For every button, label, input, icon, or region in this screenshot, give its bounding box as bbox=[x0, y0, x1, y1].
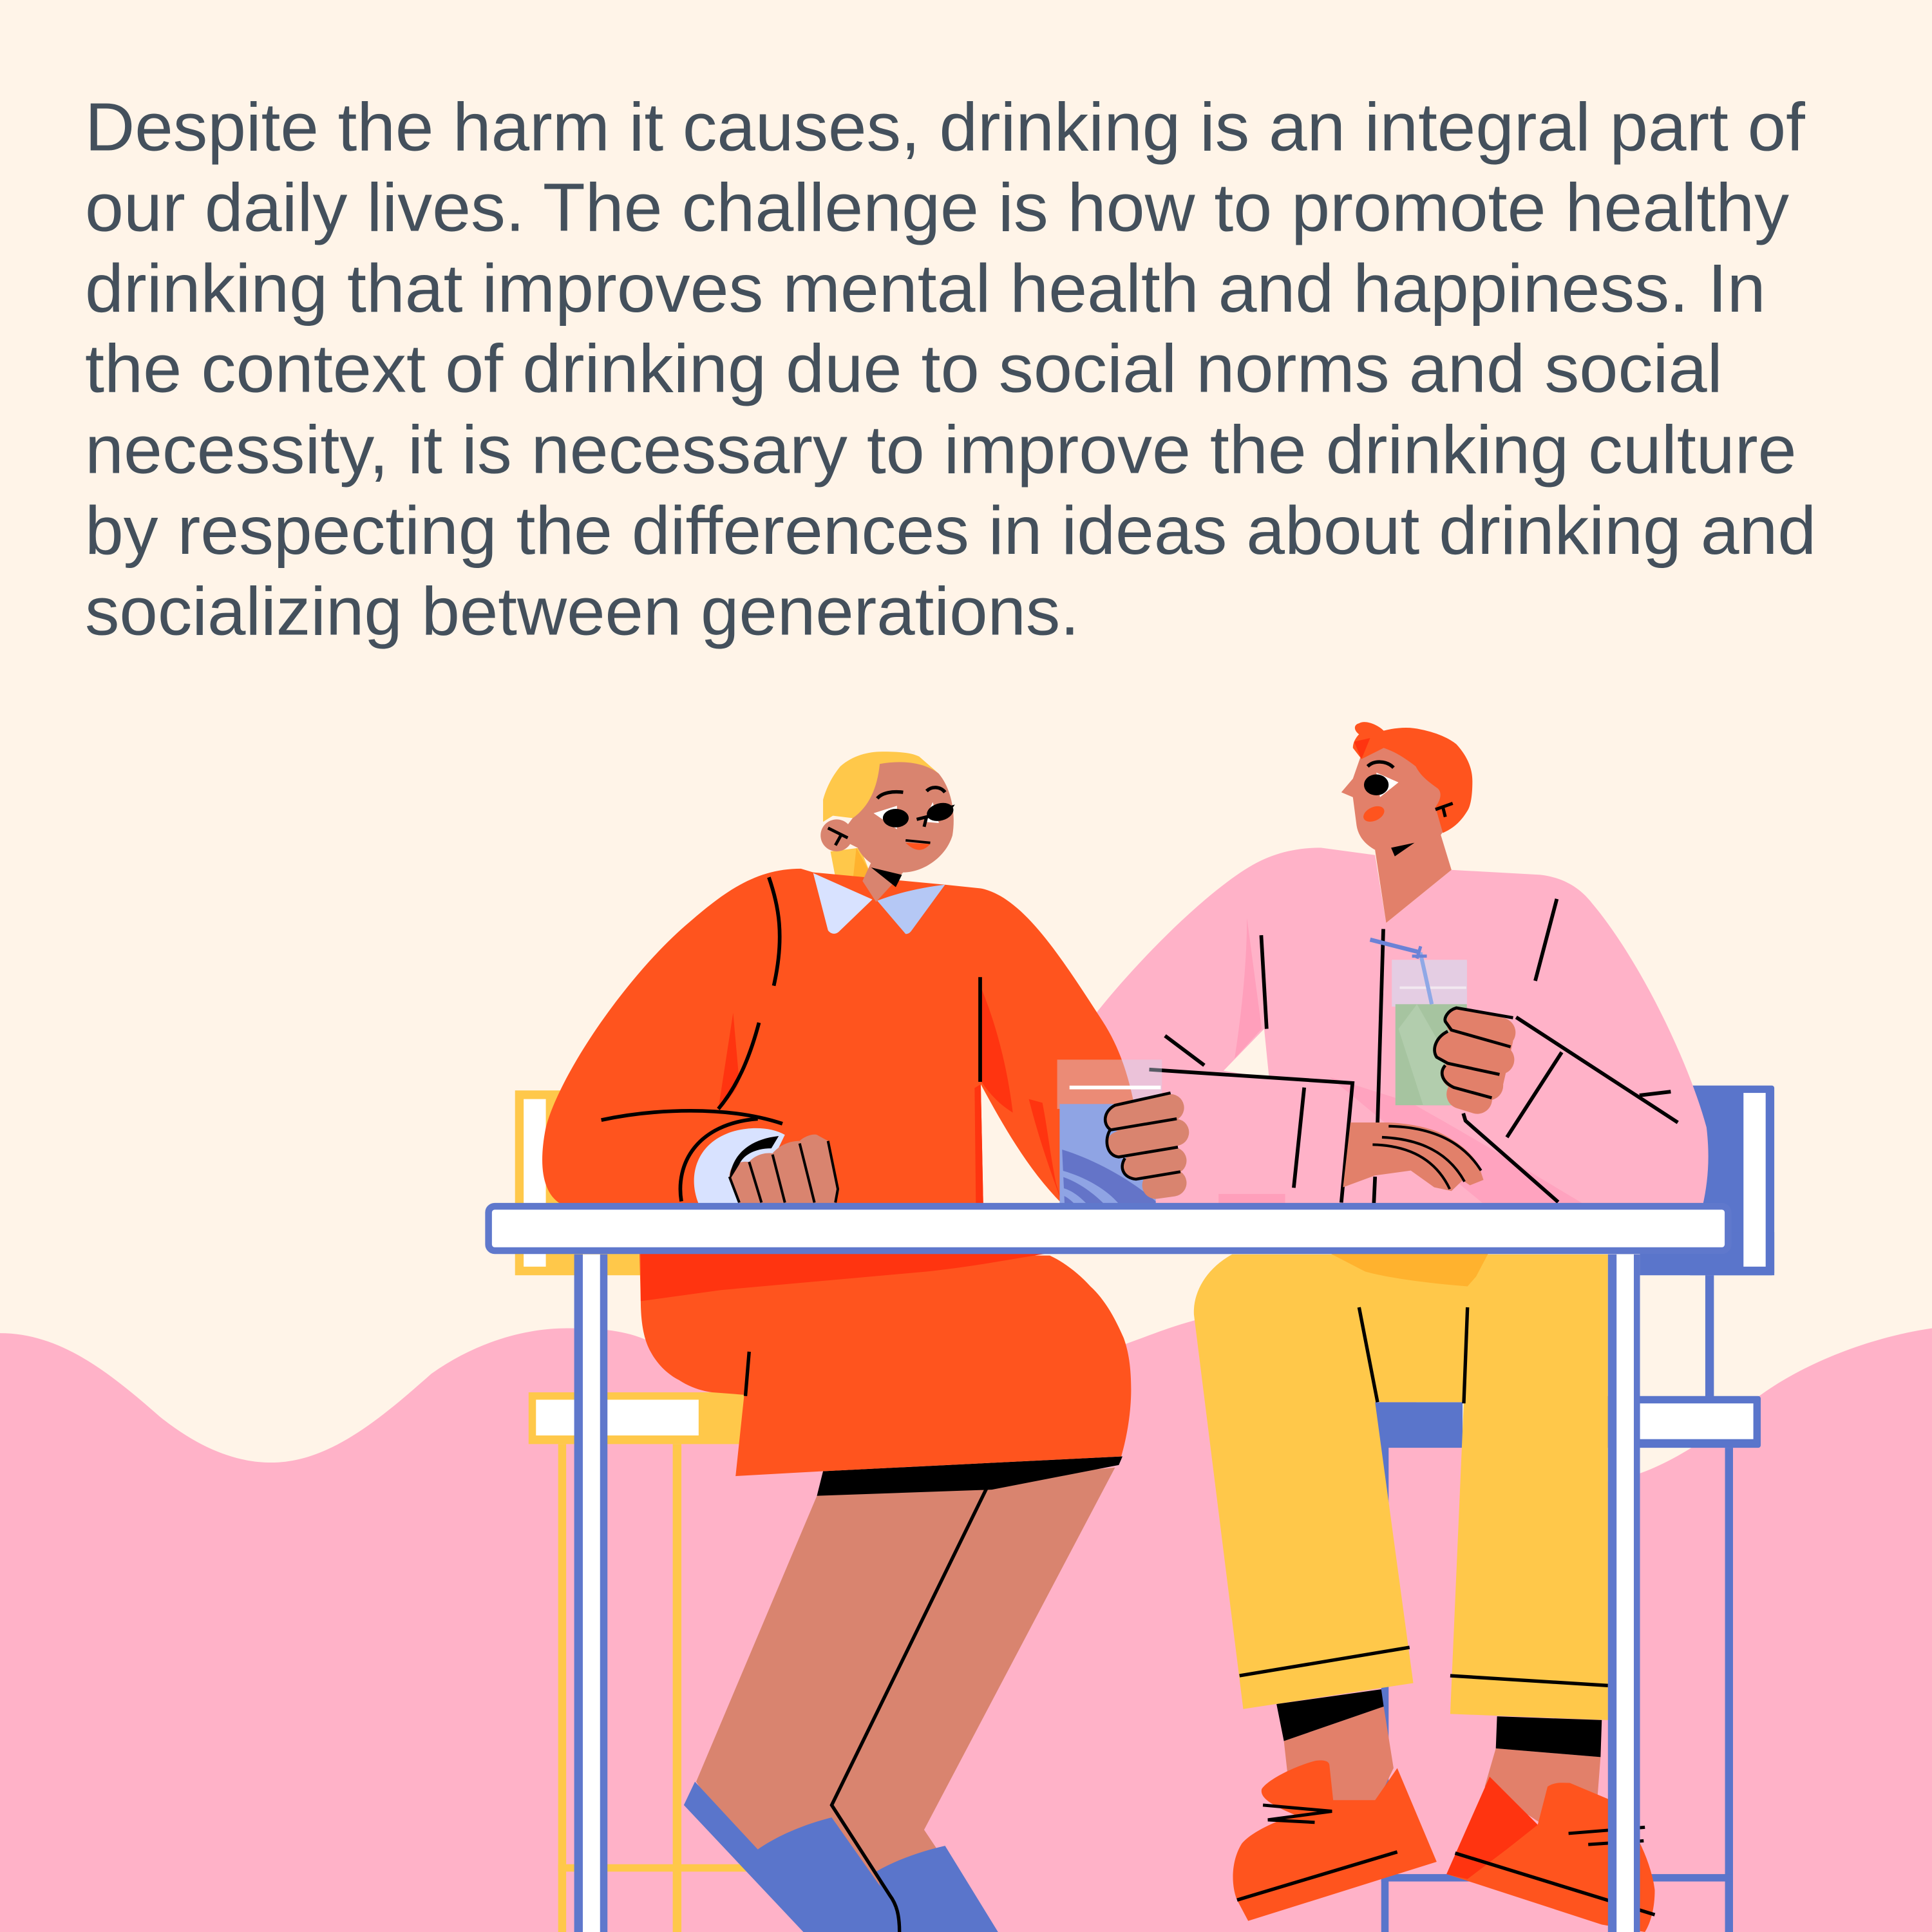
man: yellow trousers bbox=[1194, 1253, 1608, 1720]
woman figure bbox=[542, 752, 1180, 1932]
text block: intro paragraph: drinking that improves mental health and happiness. In bbox=[85, 250, 1766, 327]
man: pink shirt bbox=[1084, 848, 1709, 1205]
man: right shoe bbox=[1446, 1777, 1655, 1932]
woman: blue boots bbox=[684, 1470, 998, 1932]
man: left shoe bbox=[1233, 1761, 1437, 1921]
woman: hand holding glass bbox=[1105, 1093, 1180, 1186]
woman: hair behind neck bbox=[831, 848, 870, 889]
man: green drink glass with straw bbox=[1370, 940, 1467, 1105]
man: hand holding glass bbox=[1435, 1008, 1513, 1099]
woman: resting fist bbox=[730, 1135, 838, 1204]
table bbox=[489, 1206, 1728, 1932]
text block: intro paragraph: the context of drinking due to social norms and social bbox=[85, 330, 1723, 406]
woman: orange sweater bbox=[542, 869, 1146, 1204]
left yellow chair bbox=[515, 1090, 755, 1932]
text block: intro paragraph bbox=[85, 88, 1816, 649]
woman: sweater lines bbox=[601, 877, 980, 1201]
woman: white cuff bbox=[694, 1128, 785, 1204]
man: shirt lines bbox=[1150, 899, 1678, 1204]
text block: intro paragraph: socializing between generations. bbox=[85, 573, 1079, 649]
woman: orange skirt bbox=[639, 1253, 1131, 1496]
man: socks and ankles bbox=[1276, 1689, 1602, 1826]
text block: intro paragraph: by respecting the differences in ideas about drinking and bbox=[85, 492, 1816, 569]
man: neck and head bbox=[1341, 722, 1472, 923]
pink wave background bbox=[0, 1316, 1932, 1932]
text block: intro paragraph: our daily lives. The challenge is how to promote healthy bbox=[85, 169, 1789, 246]
woman: bare legs bbox=[696, 1468, 1115, 1910]
right table leg bbox=[1608, 1255, 1640, 1932]
text block: intro paragraph: necessity, it is necessary to improve the drinking culture bbox=[85, 412, 1797, 488]
left table leg bbox=[574, 1255, 607, 1932]
woman: white collar bbox=[813, 873, 945, 934]
woman: head bbox=[820, 752, 956, 902]
text block: intro paragraph: Despite the harm it causes, drinking is an integral part of bbox=[85, 88, 1805, 165]
right blue chair bbox=[1375, 1086, 1774, 1932]
woman: blue drink glass bbox=[1057, 1059, 1162, 1204]
table top bbox=[489, 1206, 1728, 1251]
man figure bbox=[1084, 722, 1709, 1932]
man: hand on table bbox=[1343, 1122, 1484, 1191]
